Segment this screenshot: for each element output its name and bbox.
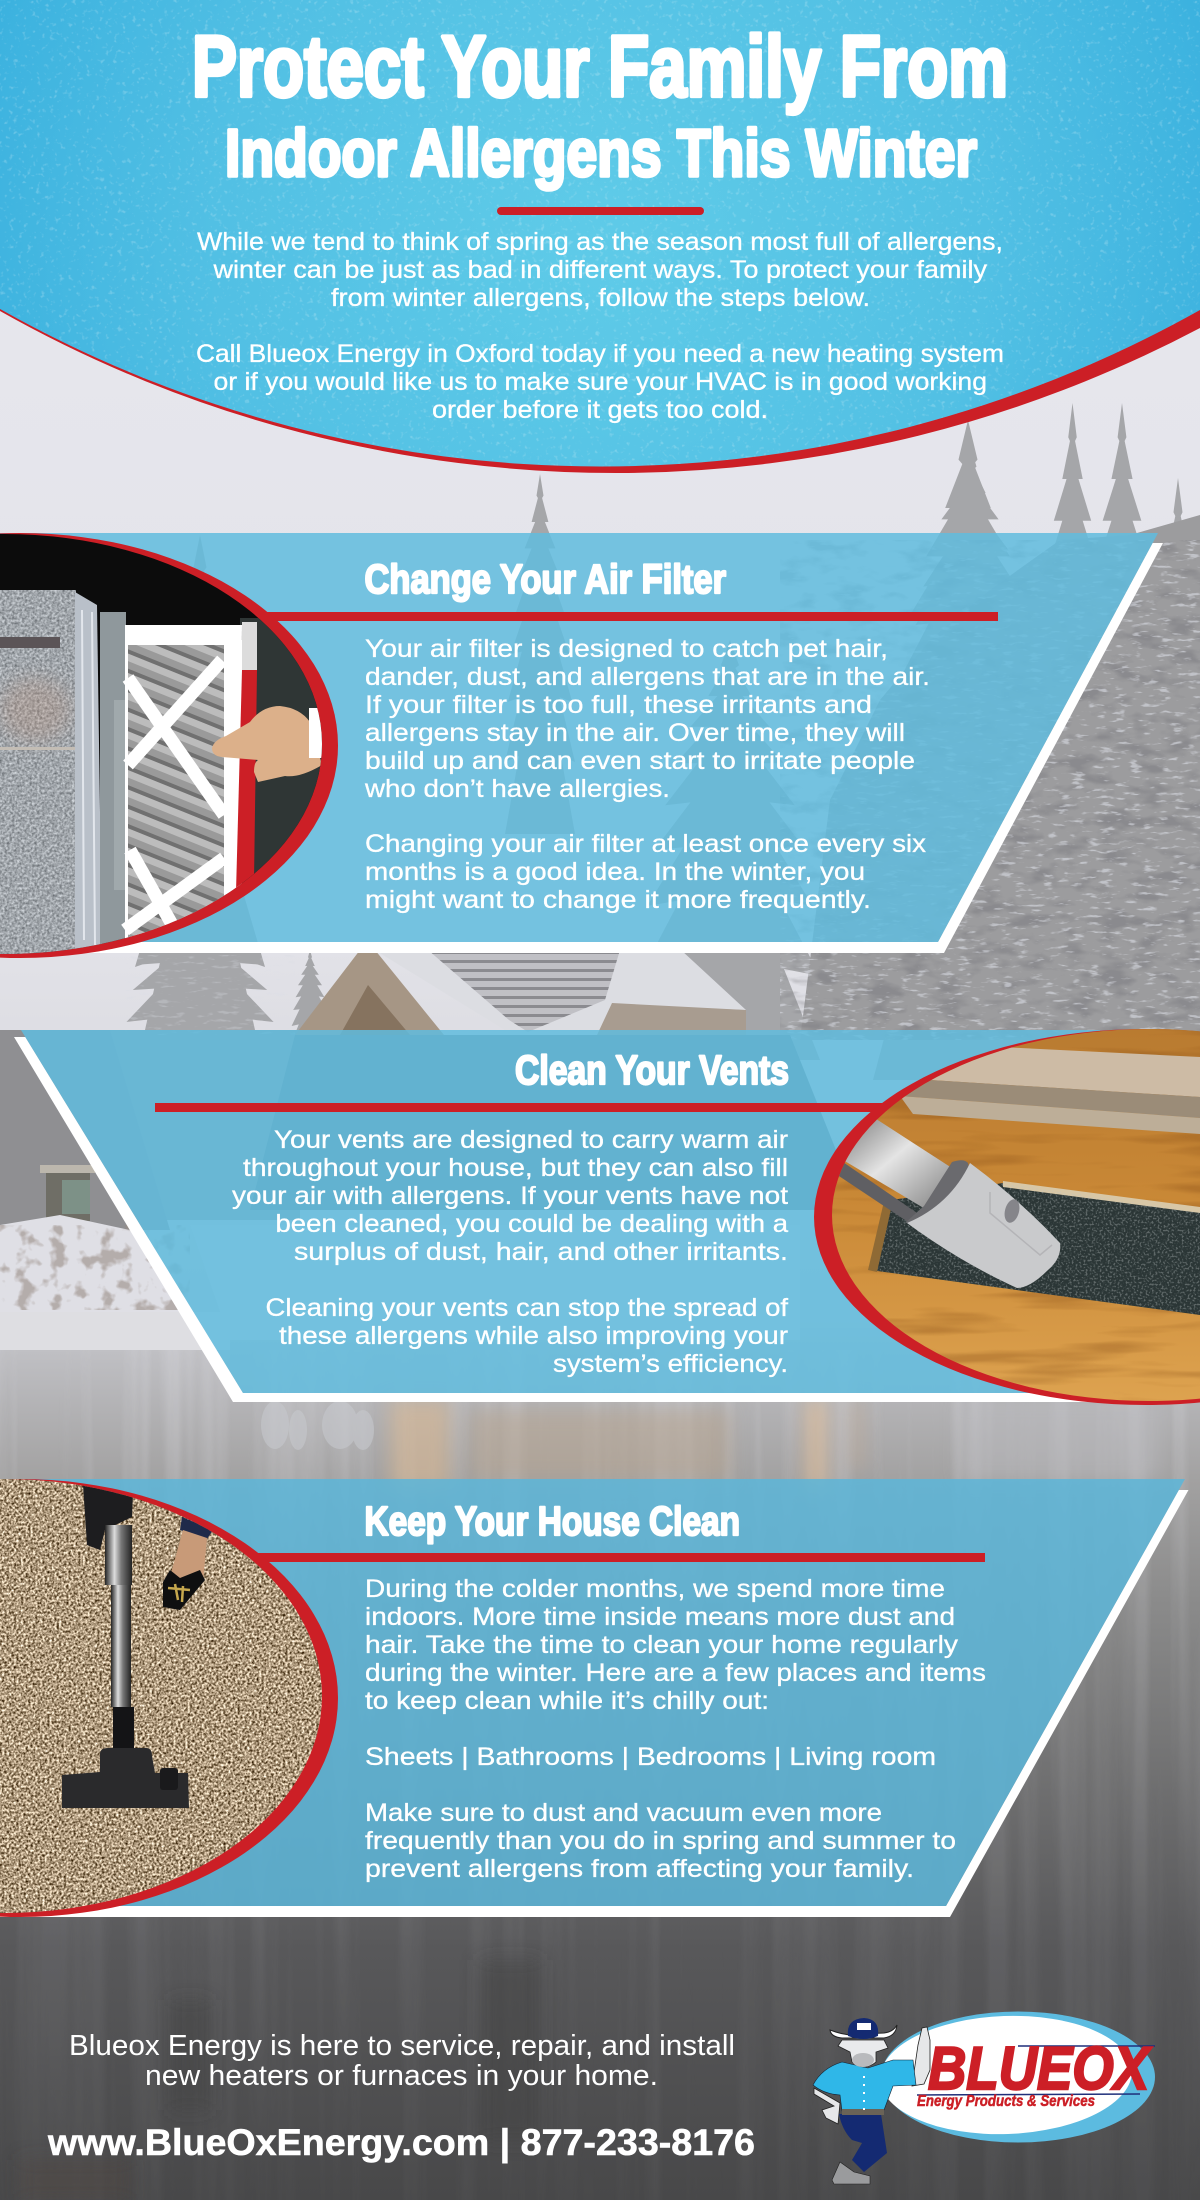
intro text: Call Blueox Energy in Oxford today if you need a new heating system (196, 340, 1004, 368)
body text (364, 635, 930, 914)
body text: dander, dust, and allergens that are in the air. (365, 663, 930, 691)
white offset band (0, 1490, 1188, 1917)
header blue dome (0, 0, 1200, 466)
body text: during the winter. Here are a few places and items (365, 1659, 986, 1687)
footer text: new heaters or furnaces in your home. (145, 2060, 658, 2092)
body text: might want to change it more frequently. (365, 886, 871, 914)
heading rule (155, 1103, 915, 1112)
body text: months is a good idea. In the winter, you (365, 858, 865, 886)
heading rule (200, 1553, 985, 1562)
panel: change your air filter (0, 520, 1163, 970)
panel: clean your vents (14, 1020, 1200, 1420)
heading rule (200, 612, 998, 621)
body text: Your vents are designed to carry warm air (274, 1126, 788, 1154)
body text: to keep clean while it’s chilly out: (365, 1687, 769, 1715)
white offset band (0, 543, 1163, 953)
photo: vacuuming a carpet (0, 1470, 340, 1920)
blue panel (0, 533, 1158, 942)
title divider (497, 207, 704, 215)
body text: Changing your air filter at least once every six (365, 830, 927, 858)
blue panel (21, 1030, 1100, 1393)
body text: system’s efficiency. (553, 1350, 788, 1378)
body text: allergens stay in the air. Over time, they will (365, 719, 905, 747)
photo: replacing an air filter (0, 520, 340, 970)
heading: Keep Your House Clean (364, 1498, 740, 1544)
body text: your air with allergens. If your vents have not (232, 1182, 788, 1210)
body text: Make sure to dust and vacuum even more (365, 1799, 882, 1827)
body text: hair. Take the time to clean your home regularly (365, 1631, 959, 1659)
reflected snow clump (261, 1401, 374, 1450)
logo wordmark: Energy Products & Services (917, 2093, 1095, 2110)
body text: surplus of dust, hair, and other irritants. (294, 1238, 788, 1266)
lakeside sign (40, 1165, 95, 1221)
body text: Your air filter is designed to catch pet hair, (365, 635, 888, 663)
logo oval (878, 2012, 1155, 2142)
heading: Change Your Air Filter (364, 556, 726, 602)
header red arc (0, 309, 1200, 473)
intro text: or if you would like us to make sure your HVAC is in good working (214, 368, 987, 396)
body text: indoors. More time inside means more dust and (365, 1603, 955, 1631)
logo wordmark: BLUEOX (928, 2035, 1153, 2102)
body text: During the colder months, we spend more time (365, 1575, 945, 1603)
blue panel (0, 1479, 1185, 1906)
header panel (0, 0, 1200, 480)
intro text (196, 228, 1004, 424)
cabin (250, 950, 860, 1210)
body text: build up and can even start to irritate people (365, 747, 915, 775)
body text: frequently than you do in spring and summer to (365, 1827, 956, 1855)
body text (365, 1575, 986, 1883)
footer text (47, 2030, 755, 2164)
heading: Clean Your Vents (515, 1047, 789, 1093)
body text: Sheets | Bathrooms | Bedrooms | Living room (365, 1743, 936, 1771)
panel: keep your house clean (0, 1470, 1188, 1920)
intro text: order before it gets too cold. (432, 396, 768, 424)
logo mascot: blue ox (813, 2018, 930, 2184)
footer text: Blueox Energy is here to service, repair, and install (69, 2030, 735, 2062)
white offset band (14, 1037, 1100, 1402)
photo: vacuuming a floor vent (814, 1020, 1200, 1420)
body text: prevent allergens from affecting your family. (365, 1855, 914, 1883)
body text: throughout your house, but they can also fill (243, 1154, 788, 1182)
body text: these allergens while also improving your (279, 1322, 788, 1350)
intro text: While we tend to think of spring as the season most full of allergens, (197, 228, 1003, 256)
title (192, 19, 1008, 191)
intro text: winter can be just as bad in different ways. To protect your family (212, 256, 988, 284)
body text: who don’t have allergies. (364, 775, 670, 803)
logo: Blueox Energy (813, 2012, 1155, 2184)
body text: If your filter is too full, these irritants and (365, 691, 872, 719)
title: Indoor Allergens This Winter (225, 116, 977, 191)
footer text: www.BlueOxEnergy.com | 877-233-8176 (47, 2122, 755, 2164)
body text (232, 1126, 788, 1378)
body text: been cleaned, you could be dealing with a (276, 1210, 788, 1238)
body text: Cleaning your vents can stop the spread of (266, 1294, 788, 1322)
intro text: from winter allergens, follow the steps below. (331, 284, 870, 312)
